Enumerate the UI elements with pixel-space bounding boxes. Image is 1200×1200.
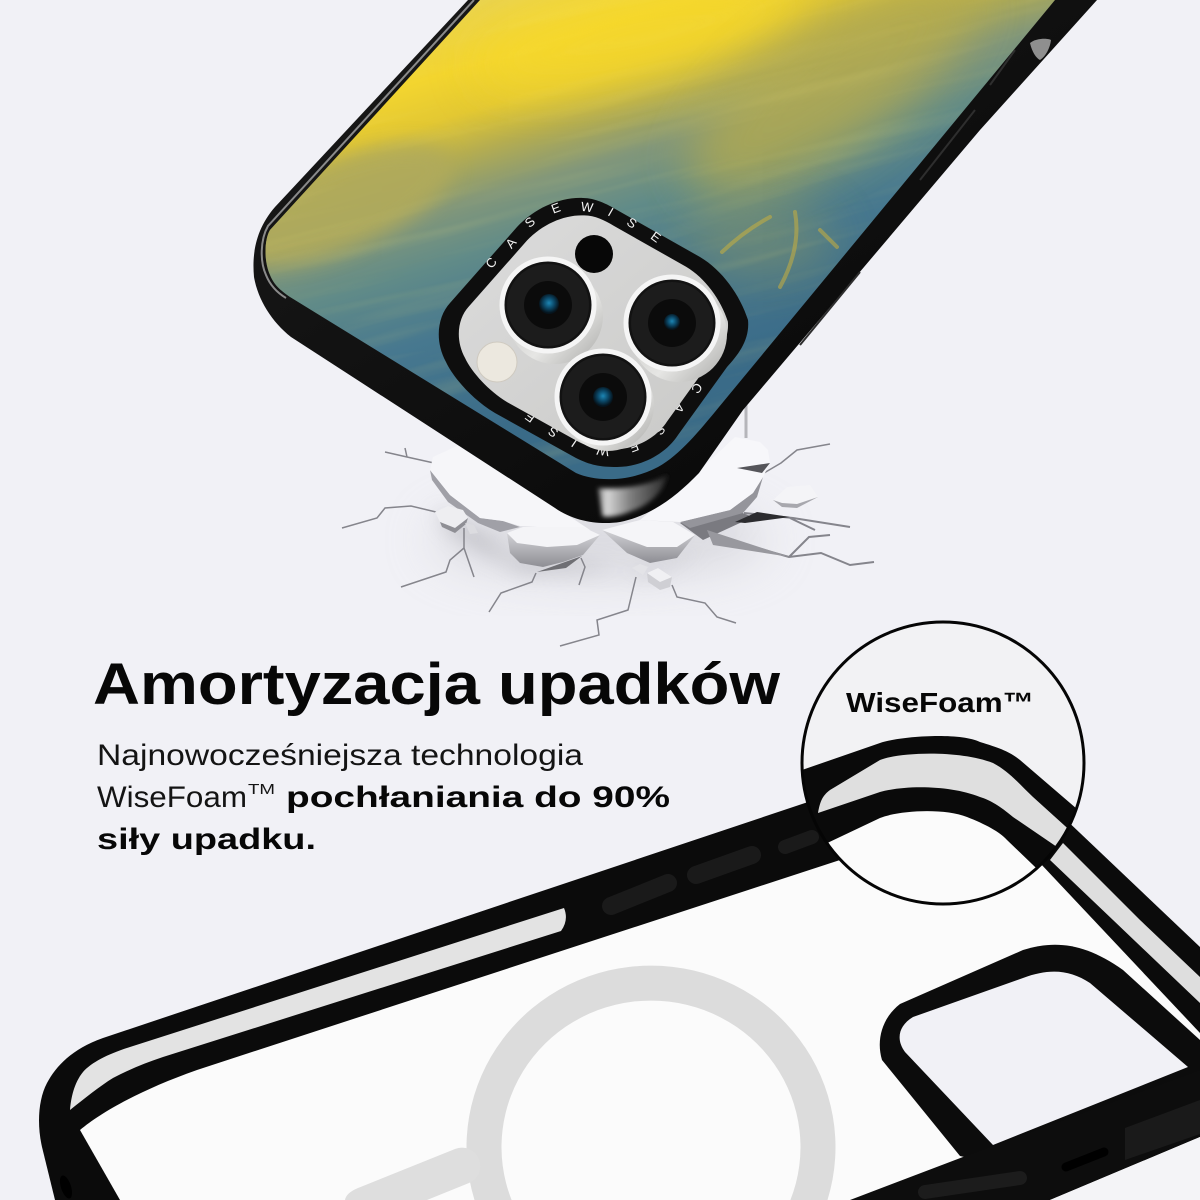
paint streaks	[354, 118, 948, 462]
brand text on ring: CASEWISE	[482, 199, 664, 271]
camera cutout frame	[880, 945, 1200, 1170]
camera island	[439, 198, 748, 467]
foam strip left	[70, 908, 566, 1110]
right lower background	[1050, 1137, 1200, 1200]
top phone with painted case	[253, 0, 1097, 523]
rock center left	[507, 527, 600, 567]
rail texture	[1125, 1100, 1200, 1160]
description text: TM	[248, 781, 275, 798]
rock left	[435, 506, 478, 534]
right gap shading	[680, 512, 753, 540]
description text: Najnowocześniejsza technologia	[97, 739, 583, 772]
volume button one	[611, 883, 668, 906]
flash	[477, 342, 517, 382]
magnified clear panel	[828, 811, 1036, 902]
cracked wall impact	[342, 405, 874, 646]
magnifier label: WiseFoam™	[846, 687, 1034, 718]
crater wall left	[430, 470, 520, 532]
clear back panel	[80, 860, 1200, 1200]
dark gap right	[735, 512, 790, 523]
bottom side rail	[850, 1070, 1200, 1200]
small rocks lower	[632, 564, 672, 590]
right crack wedge	[707, 530, 790, 557]
speaker slot	[1066, 1152, 1104, 1167]
button details	[800, 50, 1015, 345]
scratch marks	[722, 212, 837, 287]
silver camera plate	[459, 215, 728, 449]
description text: siły upadku.	[97, 823, 316, 856]
lens left	[502, 259, 603, 364]
crater soft shadow	[430, 502, 770, 578]
heading: Amortyzacja upadków	[93, 652, 781, 717]
corner glare	[598, 474, 668, 517]
description text: WiseFoam	[97, 781, 247, 814]
rock center right	[602, 520, 695, 563]
bottom clear case	[39, 795, 1200, 1200]
side button glint	[1030, 39, 1051, 60]
camera ring	[439, 198, 748, 467]
bezel highlight	[262, 0, 474, 298]
raised wall upper left	[430, 440, 590, 530]
case bumper	[253, 0, 1097, 523]
crater wall right	[680, 477, 763, 528]
volume button two	[696, 855, 752, 875]
magnifier outline	[802, 622, 1084, 904]
lens bottom	[557, 351, 654, 451]
cracks	[342, 405, 874, 646]
sensor hole	[575, 235, 613, 273]
brand text on ring lower: CASEWISE	[522, 380, 706, 459]
magnified black frame	[804, 736, 1076, 868]
magnified view	[804, 736, 1076, 868]
camera cutout opening	[900, 972, 1188, 1145]
foam strip right	[1050, 843, 1200, 1003]
painted back	[266, 0, 1055, 480]
small rock right	[773, 485, 818, 508]
charge port	[925, 1178, 1020, 1192]
lower left port	[58, 1174, 74, 1200]
black frame	[39, 795, 1200, 1200]
crack shadow under rock	[537, 556, 582, 572]
dark wedge upper right	[737, 463, 770, 473]
lens right	[626, 277, 727, 382]
magnifier callout	[802, 622, 1084, 914]
description text	[97, 739, 670, 856]
magnified foam strip	[818, 754, 1075, 847]
magsafe ring	[467, 966, 836, 1200]
magsafe alignment bar	[345, 1148, 480, 1200]
raised wall upper right	[640, 437, 770, 522]
description text: pochłaniania do 90%	[286, 781, 670, 814]
action button	[785, 837, 812, 847]
